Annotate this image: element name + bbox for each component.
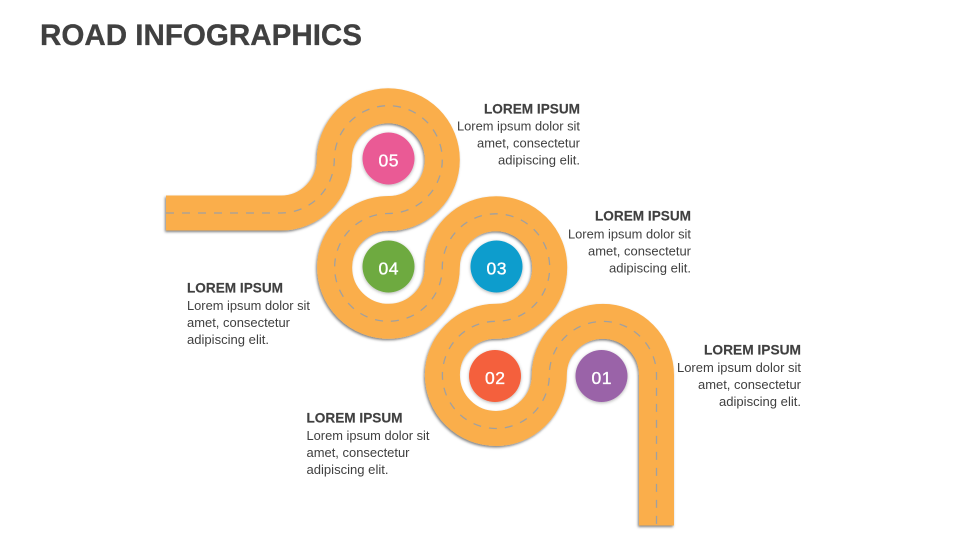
text block: step 05: LOREM IPSUM <box>484 100 580 116</box>
step 02 marker <box>469 350 521 402</box>
text block: step 05 <box>457 100 581 168</box>
text block: step 04: adipiscing elit. <box>187 333 269 347</box>
text block: step 01: Lorem ipsum dolor sit <box>677 361 802 375</box>
text block: step 05: amet, consectetur <box>477 136 580 150</box>
text block: step 03: LOREM IPSUM <box>595 208 691 224</box>
text block: step 03: amet, consectetur <box>588 244 691 258</box>
step 04 marker: 04 <box>378 258 399 278</box>
text block: step 03 <box>568 208 692 276</box>
step 05 marker <box>362 132 414 184</box>
text block: step 04: Lorem ipsum dolor sit <box>187 299 311 313</box>
text block: step 04 <box>187 280 311 347</box>
step 05 marker: 05 <box>378 150 398 170</box>
text block: step 01 <box>677 342 802 409</box>
step 01 marker: 01 <box>592 368 612 388</box>
text block: step 01: adipiscing elit. <box>719 395 801 409</box>
road centre dashes <box>166 106 656 525</box>
text block: step 04: amet, consectetur <box>187 316 290 330</box>
text block: step 02 <box>306 410 430 477</box>
winding road <box>166 106 656 525</box>
text block: step 05: adipiscing elit. <box>498 154 580 168</box>
step 01 marker <box>576 350 628 402</box>
title: ROAD INFOGRAPHICS <box>40 19 362 52</box>
text block: step 01: amet, consectetur <box>698 378 801 392</box>
text block: step 05: Lorem ipsum dolor sit <box>457 120 581 134</box>
text block: step 01: LOREM IPSUM <box>704 342 801 358</box>
step 03 marker: 03 <box>486 258 506 278</box>
step 03 marker <box>470 240 522 292</box>
text block: step 02: adipiscing elit. <box>306 463 388 477</box>
text block: step 02: amet, consectetur <box>306 446 410 460</box>
step 02 marker: 02 <box>485 368 505 388</box>
text block: step 02: Lorem ipsum dolor sit <box>306 429 430 443</box>
text block: step 03: Lorem ipsum dolor sit <box>568 228 692 242</box>
text block: step 04: LOREM IPSUM <box>187 280 283 296</box>
step 04 marker <box>362 240 414 292</box>
text block: step 02: LOREM IPSUM <box>306 410 402 426</box>
text block: step 03: adipiscing elit. <box>609 262 691 276</box>
